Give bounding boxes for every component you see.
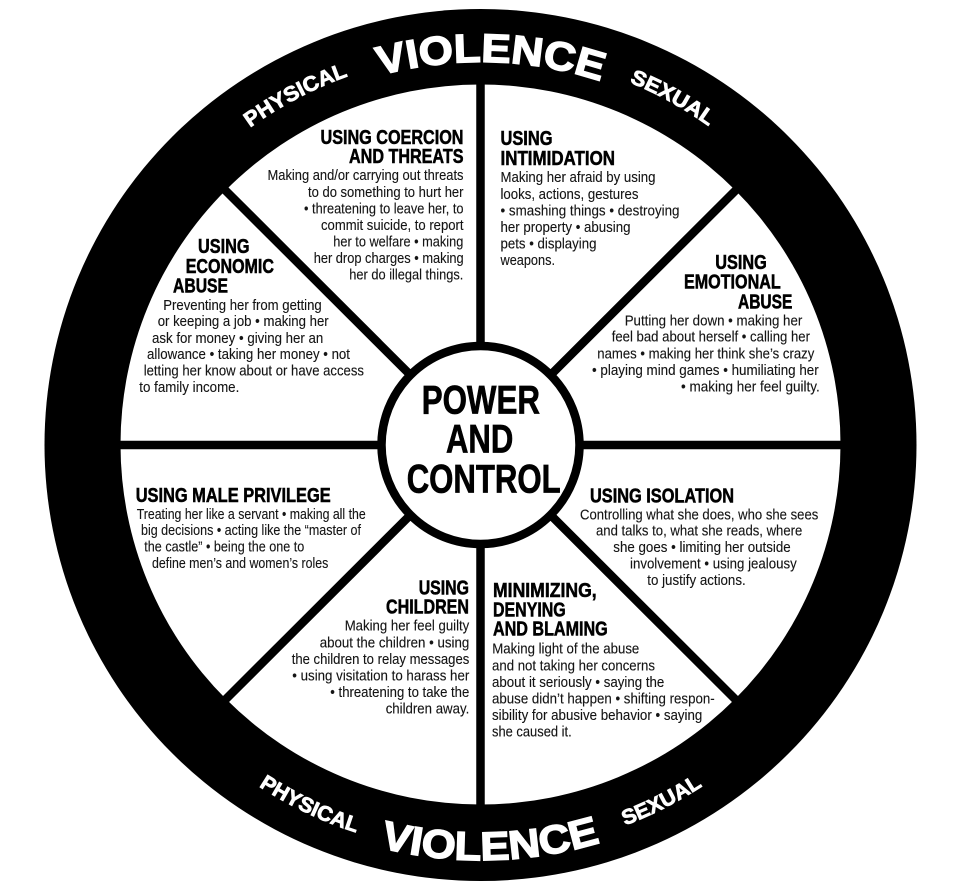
body text: coercion and threats: her do illegal things.	[349, 266, 463, 284]
body text: isolation: Controlling what she does, who she sees	[580, 506, 818, 523]
body text: children: Making her feel guilty	[345, 618, 470, 635]
body text: male privilege: big decisions • acting like the “master of	[141, 522, 362, 539]
body text: coercion and threats: commit suicide, to report	[321, 217, 464, 234]
center hub: power and control	[382, 346, 580, 544]
body text: children: • using visitation to harass her	[292, 667, 469, 684]
body text: economic abuse	[139, 297, 364, 396]
body text: emotional abuse	[592, 312, 820, 396]
body text: coercion and threats: • threatening to leave her, to	[304, 200, 464, 218]
body text: economic abuse: letting her know about or have access	[144, 363, 364, 380]
body text: emotional abuse: feel bad about herself • calling her	[612, 329, 810, 346]
body text: children: children away.	[386, 701, 469, 718]
body text: male privilege	[137, 506, 366, 572]
heading: children	[386, 577, 469, 619]
heading: coercion and threats: AND THREATS	[349, 146, 464, 168]
center hub: power and control: CONTROL	[407, 458, 561, 502]
heading: coercion and threats: USING COERCION	[320, 127, 464, 149]
heading: emotional abuse: EMOTIONAL	[684, 272, 781, 294]
body text: minimizing, denying and blaming: abuse didn’t happen • shifting respon-	[492, 690, 715, 707]
wheel spokes	[116, 80, 845, 810]
heading: emotional abuse	[684, 252, 792, 313]
white wheel interior	[120, 84, 840, 804]
body text: intimidation: pets • displaying	[500, 236, 596, 252]
body text: economic abuse: ask for money • giving her an	[152, 330, 323, 347]
body text: isolation: and talks to, what she reads, where	[596, 523, 802, 540]
heading: economic abuse: ECONOMIC	[186, 256, 274, 278]
heading: intimidation: USING	[500, 128, 552, 150]
body text: coercion and threats: her drop charges • making	[314, 250, 464, 267]
body text: minimizing, denying and blaming: sibility for abusive behavior • saying	[492, 707, 702, 724]
panel: using economic abuse	[139, 236, 364, 396]
heading: minimizing, denying and blaming: DENYING	[493, 599, 566, 621]
ring label: top PHYSICAL: PHYSICAL	[242, 65, 348, 128]
panel: using children	[292, 577, 470, 718]
panel: using coercion and threats	[268, 127, 464, 284]
panel: minimizing, denying and blaming	[492, 580, 715, 740]
body text: male privilege: Treating her like a servant • making all the	[137, 506, 366, 523]
heading: intimidation	[500, 128, 615, 170]
ring label: bottom SEXUAL: SEXUAL	[622, 778, 702, 824]
body text: children	[292, 618, 470, 718]
panel: using isolation	[580, 486, 818, 589]
body text: intimidation	[500, 169, 680, 269]
body text: children: about the children • using	[320, 634, 469, 651]
body text: economic abuse: to family income.	[139, 379, 239, 396]
ring label: bottom PHYSICAL: PHYSICAL	[259, 774, 357, 833]
body text: minimizing, denying and blaming: she caused it.	[492, 723, 572, 740]
ring label: bottom VIOLENCE: VIOLENCE	[385, 816, 600, 862]
heading: coercion and threats	[320, 127, 464, 168]
body text: children: the children to relay messages	[292, 651, 469, 668]
body text: emotional abuse: names • making her think she’s crazy	[597, 345, 815, 362]
heading: economic abuse	[173, 236, 274, 298]
heading: minimizing, denying and blaming	[493, 580, 608, 641]
center hub: power and control: AND	[446, 418, 513, 462]
heading: economic abuse: ABUSE	[173, 276, 228, 298]
heading: children: USING	[419, 577, 469, 599]
body text: coercion and threats: to do something to hurt her	[308, 184, 464, 201]
body text: intimidation: looks, actions, gestures	[500, 186, 638, 203]
heading: intimidation: INTIMIDATION	[500, 148, 615, 170]
heading: minimizing, denying and blaming: AND BLAMING	[493, 619, 608, 641]
body text: isolation	[580, 506, 818, 589]
heading: emotional abuse: USING	[715, 252, 767, 274]
panel: using intimidation	[500, 128, 680, 269]
ring label: top SEXUAL: SEXUAL	[630, 70, 710, 126]
body text: minimizing, denying and blaming	[492, 641, 715, 740]
body text: children: • threatening to take the	[330, 684, 469, 701]
heading: children: CHILDREN	[386, 597, 469, 619]
heading: economic abuse: USING	[198, 236, 250, 258]
body text: male privilege: the castle” • being the one to	[144, 539, 304, 556]
center hub: power and control: POWER	[422, 378, 540, 422]
body text: male privilege: define men’s and women’s roles	[152, 555, 328, 572]
heading: emotional abuse: ABUSE	[738, 291, 792, 313]
body text: intimidation: her property • abusing	[500, 219, 630, 236]
body text: isolation: she goes • limiting her outside	[613, 539, 791, 556]
body text: minimizing, denying and blaming: about it seriously • saying the	[492, 674, 664, 691]
body text: coercion and threats	[268, 167, 464, 284]
panel: using emotional abuse	[592, 252, 820, 396]
body text: minimizing, denying and blaming: and not taking her concerns	[492, 657, 655, 674]
body text: intimidation: Making her afraid by using	[500, 169, 656, 186]
heading: isolation: USING ISOLATION	[590, 486, 734, 508]
heading: minimizing, denying and blaming: MINIMIZING,	[493, 580, 597, 602]
panel: using male privilege	[136, 485, 366, 572]
body text: intimidation: • smashing things • destroying	[500, 202, 680, 220]
body text: intimidation: weapons.	[500, 252, 555, 269]
ring label: top VIOLENCE: VIOLENCE	[372, 34, 607, 82]
body text: emotional abuse: • playing mind games • humiliating her	[592, 362, 819, 379]
body text: coercion and threats: Making and/or carrying out threats	[268, 167, 464, 184]
body text: isolation: to justify actions.	[647, 572, 746, 589]
heading: male privilege: USING MALE PRIVILEGE	[136, 485, 331, 507]
body text: economic abuse: or keeping a job • making her	[158, 313, 329, 330]
body text: coercion and threats: her to welfare • making	[333, 234, 463, 250]
body text: emotional abuse: Putting her down • making her	[625, 312, 802, 329]
body text: emotional abuse: • making her feel guilty.	[681, 379, 820, 396]
body text: minimizing, denying and blaming: Making light of the abuse	[492, 641, 639, 658]
body text: economic abuse: Preventing her from getting	[163, 297, 322, 314]
body text: isolation: involvement • using jealousy	[630, 556, 797, 573]
body text: economic abuse: allowance • taking her money • not	[147, 346, 351, 363]
